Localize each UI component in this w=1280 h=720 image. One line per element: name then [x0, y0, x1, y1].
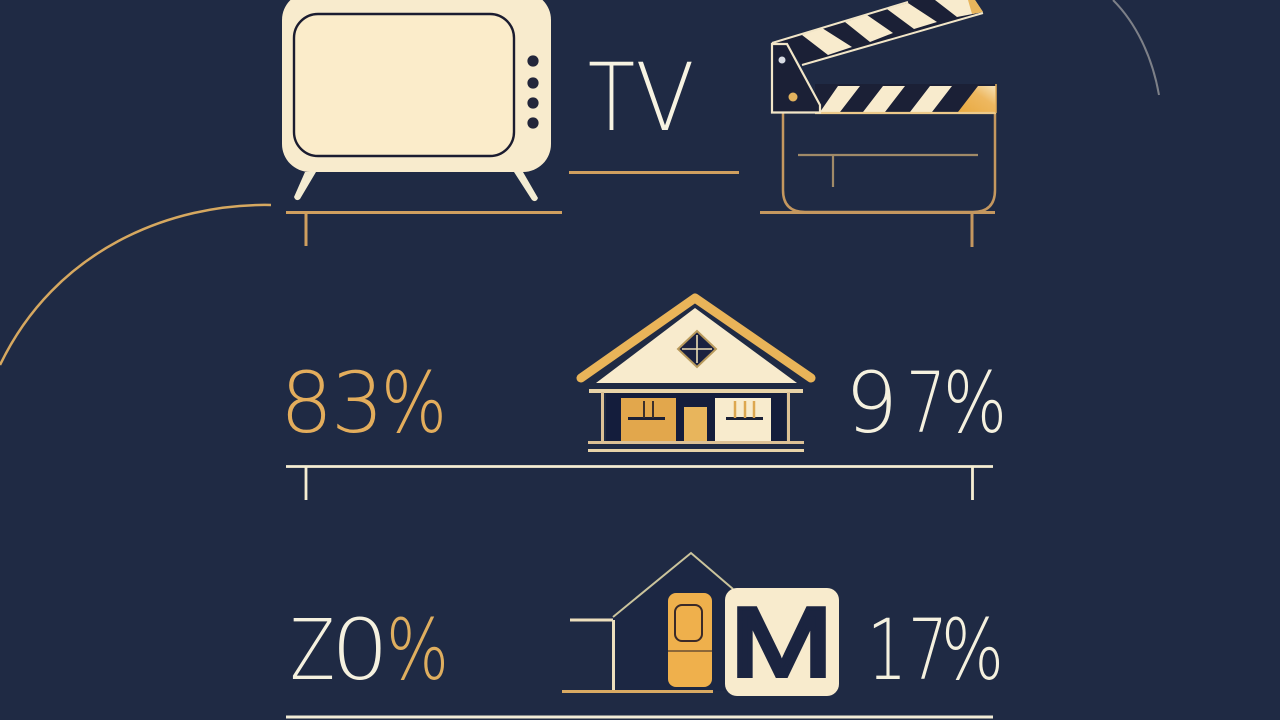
row divider with ticks — [286, 466, 993, 500]
stat: 97% — [845, 354, 1007, 452]
decorative arc: top right — [1113, 0, 1159, 95]
clapperboard shelf — [760, 212, 995, 247]
decorative arc: left — [0, 205, 271, 365]
stat: 83% — [280, 354, 447, 452]
clapper top stick — [772, 0, 983, 65]
stat: Z0%: 0 — [331, 601, 389, 699]
stat: Z0% — [290, 601, 449, 699]
stat: 97%: % — [943, 354, 1007, 452]
stat: 83%: 3 — [331, 354, 384, 452]
stat: 83%: % — [381, 354, 447, 452]
stat: Z0%: Z — [290, 601, 335, 699]
stat: 97%: 9 — [845, 354, 898, 452]
stat: 17%: 1 — [867, 601, 907, 699]
TV underline — [569, 171, 739, 174]
label: TV: V — [636, 44, 694, 153]
icon: M badge: M — [730, 587, 834, 697]
stat: 97%: 7 — [906, 354, 946, 452]
icon: television — [282, 0, 551, 201]
stat: 17%: % — [941, 601, 1004, 699]
stat: Z0%: % — [386, 601, 449, 699]
clapper hinge — [772, 44, 820, 112]
stat: 83%: 8 — [280, 354, 333, 452]
label: TV: T — [588, 44, 635, 153]
label: TV — [588, 44, 694, 153]
bottom divider — [286, 716, 993, 718]
clapper bottom stick — [815, 84, 996, 113]
icon: clapperboard — [772, 0, 996, 212]
television shelf — [286, 212, 562, 246]
clapper body — [783, 112, 995, 212]
icon: house with gold roof — [581, 298, 811, 452]
icon: house outline with door — [562, 553, 733, 692]
stat: 17% — [867, 601, 1004, 699]
stat: 17%: 7 — [908, 601, 948, 699]
